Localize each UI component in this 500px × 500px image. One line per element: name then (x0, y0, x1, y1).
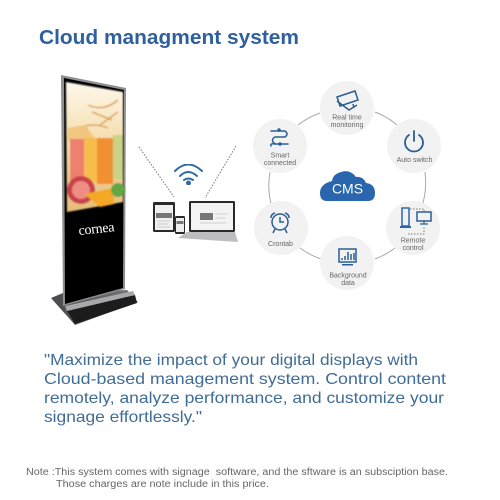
icon: power (405, 131, 423, 151)
kiosk body (61, 75, 126, 306)
icon: chart monitor (339, 249, 356, 266)
connecting ring (269, 112, 426, 259)
icon: wifi (175, 164, 202, 184)
node: Remote control (386, 201, 440, 255)
hub: CMS cloud (320, 171, 375, 201)
laptop (178, 201, 238, 242)
note text (26, 467, 448, 490)
node: Crontab: Crontab (268, 241, 293, 248)
icon: alarm clock (271, 213, 289, 233)
tablet (153, 202, 175, 232)
node: Real time monitoring: Real time (332, 114, 362, 122)
note text: Those charges are note include in this price. (56, 479, 269, 490)
node: Real time monitoring (320, 81, 374, 135)
node: Remote control: control (402, 245, 424, 252)
node: Remote control: Remote (401, 238, 425, 244)
hub: CMS cloud: CMS (332, 180, 363, 196)
node: Background data (320, 236, 374, 290)
quote text: remotely, analyze performance, and customize your (44, 390, 445, 407)
kiosk screen (66, 82, 125, 212)
brand name: cornea (78, 220, 116, 239)
icon: connected lines (271, 129, 288, 146)
kiosk display (51, 75, 138, 325)
kiosk base (51, 290, 138, 325)
quote text: Cloud-based management system. Control content (44, 371, 447, 388)
phone (175, 216, 185, 234)
node: Real time monitoring: monitoring (331, 122, 363, 129)
node: Background data: data (341, 280, 355, 287)
node: Smart connected: Smart (271, 152, 289, 160)
quote text: "Maximize the impact of your digital displays with (44, 352, 418, 369)
icon: camera (337, 91, 358, 110)
node: Auto switch: Auto switch (397, 157, 433, 164)
quote text: signage effortlessly." (44, 409, 202, 426)
node: Smart connected (253, 119, 307, 173)
devices: tablet, phone, laptop (153, 201, 238, 242)
node: Background data: Background (329, 272, 367, 280)
quote text (44, 352, 447, 426)
dotted connection lines (139, 146, 236, 198)
title: Cloud managment system (39, 27, 299, 49)
note text: Note :This system comes with signage software, and the sftware is an subsciption base. (26, 467, 448, 478)
node: Smart connected: connected (264, 160, 296, 167)
node: Auto switch (387, 119, 441, 173)
node: Crontab (254, 201, 308, 255)
icon: kiosk and monitor (400, 208, 431, 234)
